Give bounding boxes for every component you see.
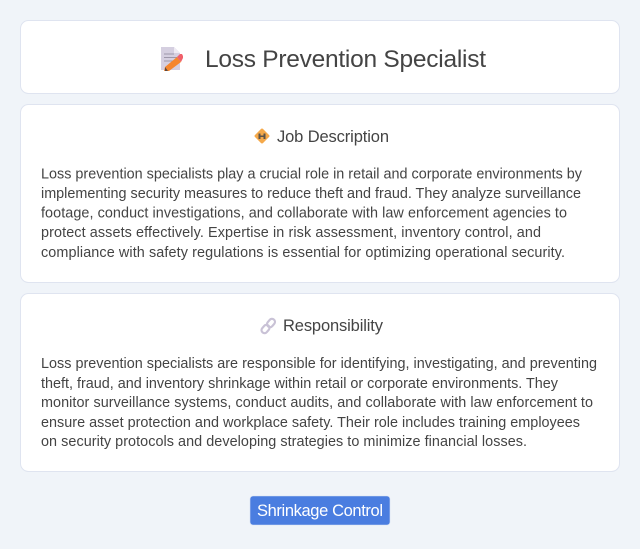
- text block: job description: implementing security measures to reduce theft and fraud. They analyze surveillance: [41, 186, 581, 202]
- tag: shrinkage control: [250, 496, 390, 525]
- text block: responsibility: ensure asset protection and workplace safety. Their role includes training employees: [41, 415, 580, 431]
- icon: chain link: [260, 318, 276, 334]
- heading: job description: Job Description: [277, 128, 389, 146]
- panel: title card: [20, 20, 620, 94]
- icon: document with pencil: [161, 47, 183, 71]
- title: Loss Prevention Specialist: [205, 46, 486, 73]
- icon: diamond sign: [254, 128, 270, 144]
- text block: responsibility: [41, 356, 597, 450]
- text block: job description: Loss prevention specialists play a crucial role in retail and corporate environments by: [41, 166, 583, 182]
- text block: responsibility: theft, fraud, and inventory shrinkage within retail or corporate environments. They: [41, 376, 559, 392]
- text block: responsibility: Loss prevention specialists are responsible for identifying, investigating, and preventing: [41, 356, 597, 372]
- text block: job description: compliance with safety regulations is essential for optimizing operational security.: [41, 245, 565, 261]
- text block: job description: footage, conduct investigations, and collaborate with law enforcement agencies to: [41, 206, 567, 222]
- tag: shrinkage control: Shrinkage Control: [257, 502, 383, 520]
- text block: job description: protect assets effectively. Expertise in risk assessment, inventory control, and: [41, 225, 541, 241]
- panel: responsibility: [20, 294, 620, 472]
- heading: responsibility: Responsibility: [283, 317, 384, 335]
- text block: job description: [41, 166, 583, 261]
- panel: job description: [20, 104, 620, 282]
- text block: responsibility: on security protocols and developing strategies to minimize financial losses.: [41, 434, 527, 450]
- text block: responsibility: monitor surveillance systems, conduct audits, and collaborate with law enforcement to: [41, 395, 593, 411]
